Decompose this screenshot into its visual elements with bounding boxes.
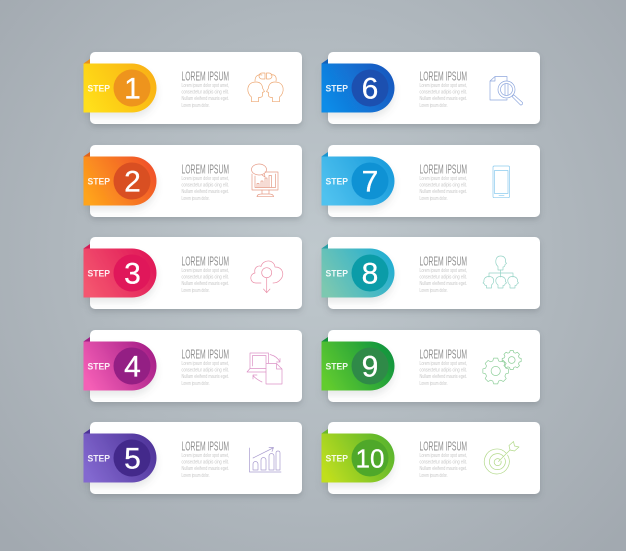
panel: step 7	[322, 145, 540, 217]
text block: step 1: Nullam eleifend mauris eget.	[182, 96, 229, 102]
text block: step 10: Lorem ipsum dolor.	[420, 473, 448, 479]
text block: step 6	[420, 68, 467, 109]
ribbon tab: step 9: STEP	[326, 362, 349, 372]
text block: step 3: Lorem ipsum dolor.	[182, 288, 210, 294]
text block: step 10: LOREM IPSUM	[420, 438, 467, 454]
text block: step 9: LOREM IPSUM	[420, 346, 467, 362]
text block: step 1	[182, 68, 229, 109]
ribbon tab: step 8: 8	[362, 258, 378, 290]
icon: cloud download	[251, 261, 283, 293]
text block: step 2: consectetur adipis cing elit.	[182, 182, 229, 188]
panel: step 8	[322, 237, 540, 309]
text block: step 4: LOREM IPSUM	[182, 346, 229, 362]
text block: step 3	[182, 254, 229, 294]
text block: step 10	[420, 438, 467, 479]
ribbon tab: step 3: STEP	[88, 268, 111, 280]
ribbon tab: step 7: STEP	[326, 176, 349, 188]
text block: step 7	[420, 162, 467, 202]
text block: step 2: LOREM IPSUM	[182, 162, 229, 176]
text block: step 5: consectetur adipis cing elit.	[182, 460, 229, 466]
ribbon tab: step 8	[322, 244, 394, 298]
ribbon tab: step 8: STEP	[326, 268, 349, 280]
text block: step 2: Lorem ipsum dolor spot amet,	[182, 176, 229, 182]
ribbon tab: step 2	[84, 152, 156, 206]
text block: step 5	[182, 438, 229, 479]
text block: step 7: Lorem ipsum dolor.	[420, 196, 448, 202]
text block: step 6: consectetur adipis cing elit.	[420, 90, 467, 96]
ribbon tab: step 1	[84, 59, 156, 112]
icon: document with magnifier	[490, 76, 523, 105]
text block: step 8	[420, 254, 467, 294]
icon: growth bar chart	[250, 448, 281, 472]
text block: step 4: Lorem ipsum dolor spot amet,	[182, 361, 229, 367]
text block: step 9: Lorem ipsum dolor.	[420, 381, 448, 387]
ribbon tab: step 9: 9	[362, 350, 378, 384]
text block: step 9	[420, 346, 467, 387]
text block: step 8: Lorem ipsum dolor spot amet,	[420, 268, 467, 274]
text block: step 9: Nullam eleifend mauris eget.	[420, 374, 467, 380]
text block: step 5: Nullam eleifend mauris eget.	[182, 466, 229, 472]
text block: step 9: Lorem ipsum dolor spot amet,	[420, 361, 467, 367]
icon: target with arrow	[484, 442, 519, 474]
text block: step 3: Nullam eleifend mauris eget.	[182, 281, 229, 287]
text block: step 2: Nullam eleifend mauris eget.	[182, 189, 229, 195]
text block: step 1: Lorem ipsum dolor spot amet,	[182, 83, 229, 89]
text block: step 6: LOREM IPSUM	[420, 68, 467, 84]
text block: step 7: LOREM IPSUM	[420, 162, 467, 176]
text block: step 1: consectetur adipis cing elit.	[182, 90, 229, 96]
text block: step 5: Lorem ipsum dolor.	[182, 473, 210, 479]
icon: smartphone	[493, 166, 510, 198]
panel: step 5	[84, 422, 302, 494]
ribbon tab: step 10: STEP	[326, 454, 349, 464]
ribbon tab: step 4	[84, 337, 156, 390]
panel: step 4	[84, 330, 302, 402]
ribbon tab: step 6: STEP	[326, 84, 349, 94]
text block: step 10: Nullam eleifend mauris eget.	[420, 466, 467, 472]
panel: step 10	[322, 422, 540, 494]
ribbon tab: step 4: STEP	[88, 362, 111, 372]
icon: monitor with chart and speech bubble	[252, 164, 278, 197]
panel: step 2	[84, 145, 302, 217]
ribbon tab: step 6: 6	[362, 72, 378, 106]
text block: step 8: consectetur adipis cing elit.	[420, 274, 467, 280]
ribbon tab: step 3	[84, 244, 156, 298]
text block: step 10: Lorem ipsum dolor spot amet,	[420, 453, 467, 459]
ribbon tab: step 6	[322, 59, 394, 112]
ribbon tab: step 1: STEP	[88, 84, 111, 94]
text block: step 3: Lorem ipsum dolor spot amet,	[182, 268, 229, 274]
text block: step 2	[182, 162, 229, 202]
ribbon tab: step 4: 4	[124, 350, 141, 384]
text block: step 7: Nullam eleifend mauris eget.	[420, 189, 467, 195]
ribbon tab: step 10	[322, 429, 394, 482]
text block: step 10: consectetur adipis cing elit.	[420, 460, 467, 466]
icon: laptop and document transfer	[247, 353, 282, 384]
text block: step 8: LOREM IPSUM	[420, 254, 467, 268]
text block: step 6: Lorem ipsum dolor.	[420, 103, 448, 109]
ribbon tab: step 3: 3	[124, 258, 141, 290]
ribbon tab: step 5: STEP	[88, 454, 111, 464]
text block: step 6: Nullam eleifend mauris eget.	[420, 96, 467, 102]
ribbon tab: step 10: 10	[356, 444, 384, 474]
ribbon tab: step 5	[84, 429, 156, 482]
text block: step 5: LOREM IPSUM	[182, 438, 229, 454]
icon: heads with plug	[248, 73, 283, 102]
ribbon tab: step 7	[322, 152, 394, 206]
text block: step 3: consectetur adipis cing elit.	[182, 274, 229, 280]
panel: step 9	[322, 330, 540, 402]
icon: organisation chart of heads	[483, 256, 518, 288]
ribbon tab: step 2: STEP	[88, 176, 111, 188]
ribbon tab: step 9	[322, 337, 394, 390]
text block: step 9: consectetur adipis cing elit.	[420, 368, 467, 374]
text block: step 1: Lorem ipsum dolor.	[182, 103, 210, 109]
text block: step 4	[182, 346, 229, 387]
text block: step 7: Lorem ipsum dolor spot amet,	[420, 176, 467, 182]
panel: step 6	[322, 52, 540, 124]
text block: step 8: Lorem ipsum dolor.	[420, 288, 448, 294]
ribbon tab: step 1: 1	[124, 72, 141, 106]
ribbon tab: step 2: 2	[124, 166, 141, 198]
text block: step 2: Lorem ipsum dolor.	[182, 196, 210, 202]
ribbon tab: step 7: 7	[362, 166, 378, 198]
ribbon tab: step 5: 5	[124, 442, 141, 476]
text block: step 4: Nullam eleifend mauris eget.	[182, 374, 229, 380]
text block: step 6: Lorem ipsum dolor spot amet,	[420, 83, 467, 89]
text block: step 3: LOREM IPSUM	[182, 254, 229, 268]
text block: step 1: LOREM IPSUM	[182, 68, 229, 84]
text block: step 4: consectetur adipis cing elit.	[182, 368, 229, 374]
icon: gears	[483, 350, 521, 384]
text block: step 5: Lorem ipsum dolor spot amet,	[182, 453, 229, 459]
panel: step 3	[84, 237, 302, 309]
text block: step 4: Lorem ipsum dolor.	[182, 381, 210, 387]
panel: step 1	[84, 52, 302, 124]
text block: step 8: Nullam eleifend mauris eget.	[420, 281, 467, 287]
text block: step 7: consectetur adipis cing elit.	[420, 182, 467, 188]
